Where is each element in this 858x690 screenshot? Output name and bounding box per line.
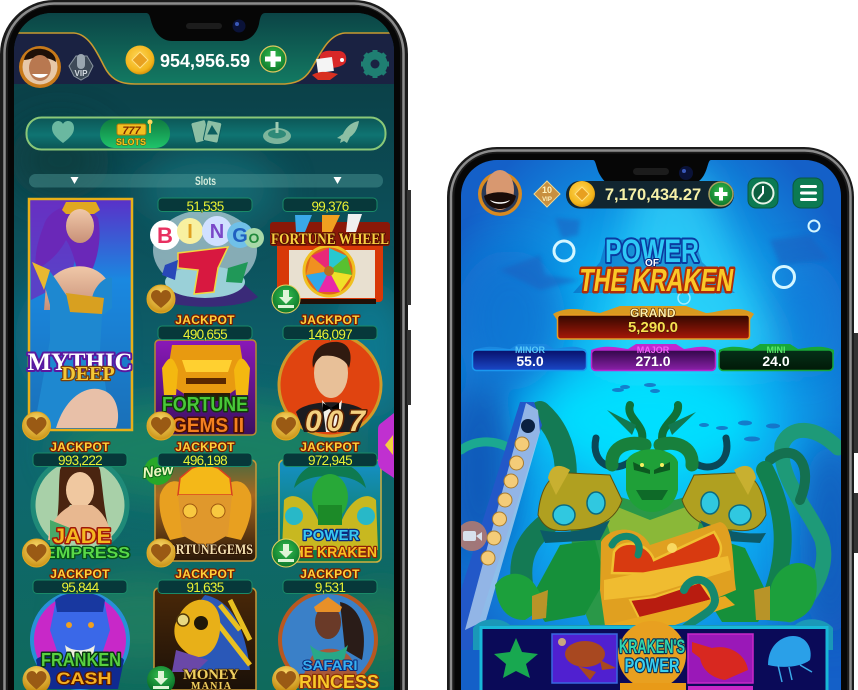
game tile: Mythic Deep [28,199,132,430]
settings gear [361,50,389,78]
badge: New: New [142,461,176,482]
VIP badge: VIP [75,69,88,78]
title: Fortune Gems: FORTUNEGEMS [159,542,253,558]
kraken figure [495,405,817,636]
menu button [793,178,823,208]
avatar left [19,46,61,88]
plus button [260,46,286,72]
game tile: Franken Cash: CASH [56,669,112,688]
game tile: Jade Empress [33,456,130,562]
jackpot: major: 271.0 [635,353,671,369]
reel symbol: orange wild [618,621,686,689]
jackpot: grand: GRAND [630,306,676,320]
game tile: Bingo 7s [150,210,264,307]
game tile: Power of the Kraken: THE KRAKEN [285,544,377,561]
VIP badge right: VIP [542,197,552,203]
slots filter bar: Slots [195,174,216,188]
head [626,449,678,512]
top header band [14,13,394,84]
game tile: Fortune Gems II [155,340,256,437]
jackpot values: JACKPOT [50,440,110,454]
jackpot: minor [472,344,586,370]
title: Fortune Wheel: FORTUNE WHEEL [271,231,389,248]
floating record button [457,521,487,551]
balance bar right [566,181,734,208]
game tile: Money Mania [154,588,256,690]
armor skirts [540,520,610,543]
notch right [593,160,711,187]
game tile: Jade Empress: EMPRESS [44,545,130,562]
game tile: Bingo 7s: I [187,221,193,243]
jackpot values: 9,531 [315,580,345,595]
reel symbol: jellyfish [768,636,812,682]
tab rocket [337,121,359,143]
title: Mythic: MYTHIC [28,349,132,376]
jackpot values: JACKPOT [175,313,235,327]
jackpot: mini [719,344,834,370]
game tile: Fortune Gems [155,460,256,561]
fish school [612,383,780,442]
active slots tab [100,119,170,148]
jackpot: major: MAJOR [637,345,670,355]
right screen [444,160,858,690]
jackpot: grand [553,306,754,339]
title: Safari Princess: SAFARI [302,657,358,673]
jackpot: minor: MINOR [515,345,545,355]
left screen [10,13,420,690]
tab cards [191,119,222,143]
balance right: 7,170,434.27 [605,186,701,204]
title: Power of the Kraken: POWER [303,527,359,544]
left arm [530,540,605,622]
coin tube [461,402,542,650]
torso [570,495,735,625]
game logo: POWER [605,233,699,269]
jackpot values: JACKPOT [300,567,360,581]
game tile: 007 [279,334,381,438]
game tile: Bingo 7s: G [232,225,248,247]
active slots tab: SLOTS [116,137,146,147]
title: Fortune Gems II: FORTUNE [162,394,248,416]
jackpot values: 51,535 [186,199,224,214]
balance: 954,956.59 [160,51,250,71]
reel panel: POWER [624,656,680,677]
tentacles on chest [612,536,715,628]
title: Money Mania: MONEY [183,667,239,683]
bubbles [554,220,820,304]
jackpot values [33,198,377,595]
clock button [748,178,778,208]
side tab: promo [378,413,394,478]
left shoulder armor [538,473,622,531]
game logo: THE KRAKEN [577,262,736,298]
active slots tab: 777 [122,125,142,137]
game tile: Franken Cash [32,592,128,689]
jackpot: major [591,344,716,370]
jackpot: mini: 24.0 [762,353,790,369]
panel: right phone [444,147,858,690]
game tile: Power of the Kraken [279,460,381,562]
game tile: Bingo 7s: O [249,230,260,246]
jackpot values: 993,222 [58,453,102,468]
mailbox icon [312,51,346,80]
panel: left phone [0,0,420,690]
jackpot: minor: 55.0 [516,353,544,369]
title: Deep: DEEP [61,363,115,385]
title: 007: 007 [305,405,366,438]
game tile: Safari Princess [280,592,379,690]
tab roulette [263,122,291,144]
jackpot values: JACKPOT [300,313,360,327]
phone frame left [0,0,411,690]
reel text: Kraken's Power: KRAKEN'S [619,637,685,658]
reel panel [473,619,833,690]
armor gems [553,492,751,525]
game logo: OF [645,258,659,269]
VIP badge right [534,181,560,207]
category tabs [26,118,386,150]
jackpot values: 95,844 [61,580,100,595]
title: Franken Cash: FRANKEN [41,650,121,670]
jackpot values: JACKPOT [175,440,235,454]
title: Jade Empress: JADE [53,525,111,548]
jackpot values: JACKPOT [175,567,235,581]
reel symbol: turtle [552,634,617,683]
game tile: Fortune Gems II: GEMS II [172,415,244,437]
favourite and download buttons [22,285,300,690]
slots filter bar [29,174,383,188]
game tile: Bingo 7s: N [210,221,224,243]
reel symbol: anglerfish [688,634,753,683]
right arm [702,540,770,622]
jackpot values: 99,376 [311,199,349,214]
reel symbol: starfish [494,638,538,678]
left tentacles [461,412,566,600]
jackpot values: 972,945 [308,453,352,468]
treasure chest [600,522,736,636]
game tile: Fortune Wheel [270,214,390,304]
avatar right [478,170,522,216]
phone frame right [447,147,858,690]
jackpot values: 91,635 [186,580,224,595]
jackpot values: JACKPOT [300,440,360,454]
VIP badge right: 10 [542,185,552,195]
VIP badge [69,54,93,80]
horns [595,405,727,467]
jackpot values: 490,655 [183,327,227,342]
right tentacles [765,430,838,615]
coin left [126,46,154,74]
game logo [573,233,736,298]
jackpot: grand: 5,290.0 [628,319,678,336]
jackpot values: 496,198 [183,453,227,468]
tab heart [52,121,74,143]
phone notch left [146,13,265,41]
game tile: Bingo 7s: B [157,223,173,248]
right shoulder armor [682,473,766,531]
jackpot values: 146,097 [308,327,352,342]
jackpot values: JACKPOT [50,567,110,581]
jackpot: mini: MINI [766,345,786,355]
